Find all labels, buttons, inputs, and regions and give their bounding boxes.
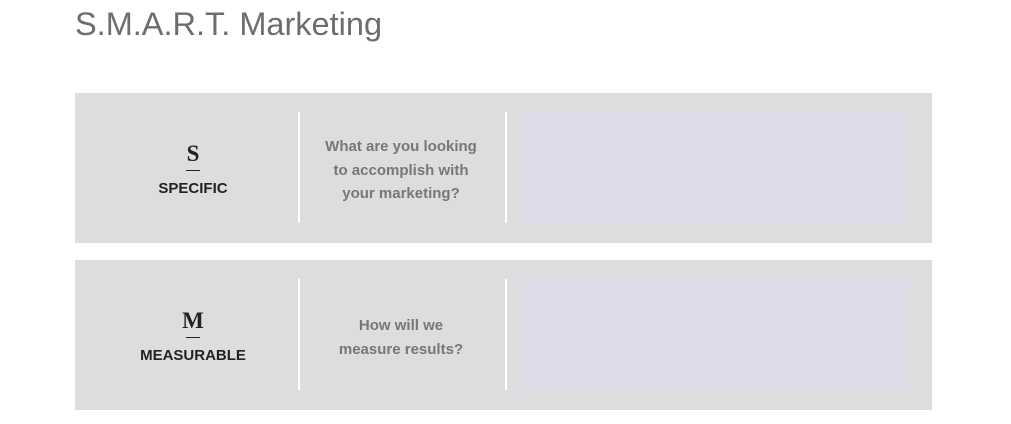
- question: specific: What are you looking: [325, 138, 477, 155]
- panel: measurable: [75, 260, 932, 410]
- question: specific: your marketing?: [342, 185, 460, 202]
- label: M measurable: M: [182, 308, 204, 333]
- label: M measurable: [140, 308, 246, 364]
- question: measurable: How will we: [359, 317, 443, 334]
- label: M measurable: MEASURABLE: [140, 347, 246, 364]
- question: specific: to accomplish with: [333, 162, 468, 178]
- input box: specific: [523, 112, 909, 223]
- label: S specific: [158, 141, 228, 197]
- input box: measurable: [523, 279, 909, 390]
- title: S.M.A.R.T. Marketing: [75, 6, 382, 42]
- question: measurable: measure results?: [339, 340, 463, 358]
- question: specific: [325, 138, 477, 202]
- label: S specific: SPECIFIC: [158, 180, 228, 197]
- question: measurable: [339, 317, 463, 358]
- label: S specific: S: [187, 141, 199, 166]
- panel: specific: [75, 93, 932, 243]
